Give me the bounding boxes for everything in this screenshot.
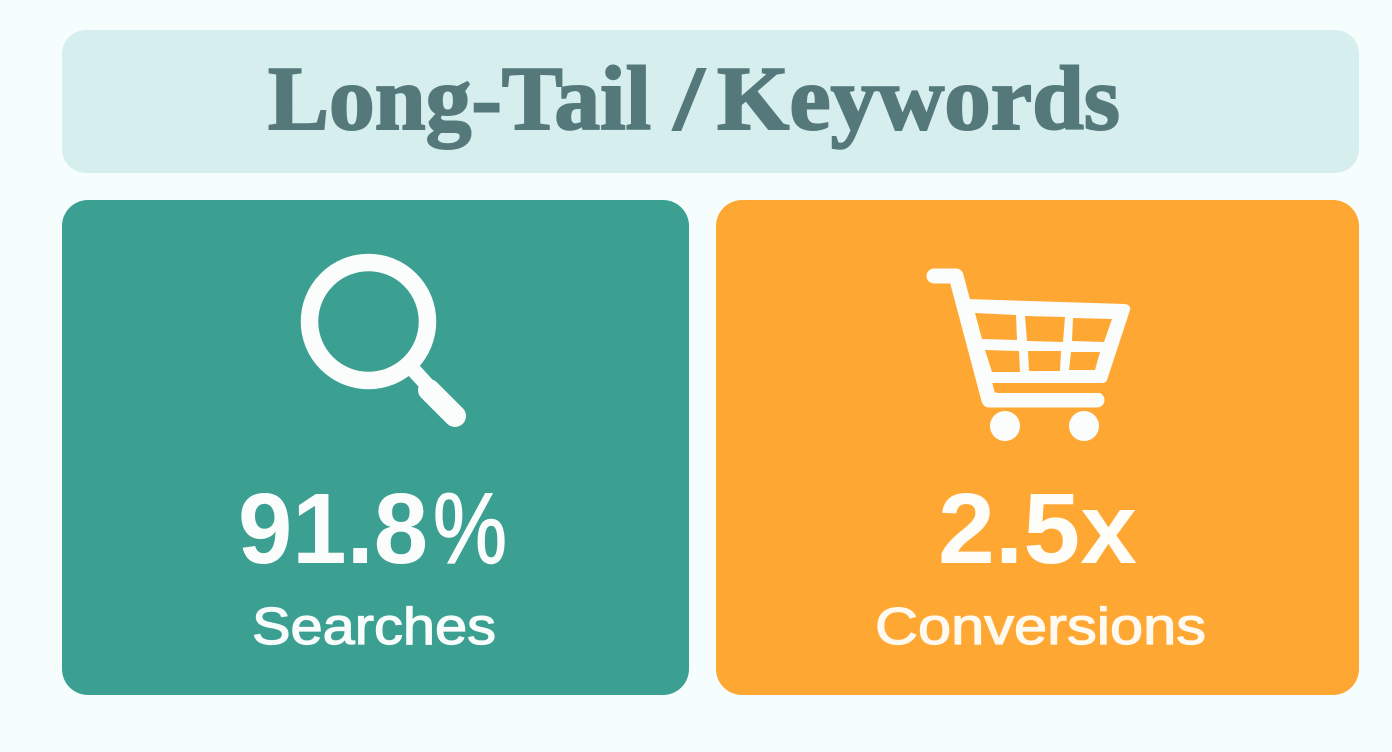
stat: 91.8%: % xyxy=(433,473,507,585)
title banner xyxy=(62,30,1359,173)
panel: conversions xyxy=(716,200,1359,695)
title text: Long-Tail xyxy=(268,48,651,149)
stat: 91.8%: 91.8 xyxy=(238,473,428,585)
title text xyxy=(268,48,1120,149)
icon: magnifying glass xyxy=(310,262,455,416)
label: conversions: Conversions xyxy=(875,598,1206,656)
title text: Keywords xyxy=(717,48,1120,149)
icon: shopping cart xyxy=(934,276,1130,441)
panel: searches xyxy=(62,200,689,695)
stat: 2.5x: 2.5x xyxy=(938,473,1137,585)
label: searches: Searches xyxy=(252,598,496,656)
title text: / xyxy=(673,48,706,149)
